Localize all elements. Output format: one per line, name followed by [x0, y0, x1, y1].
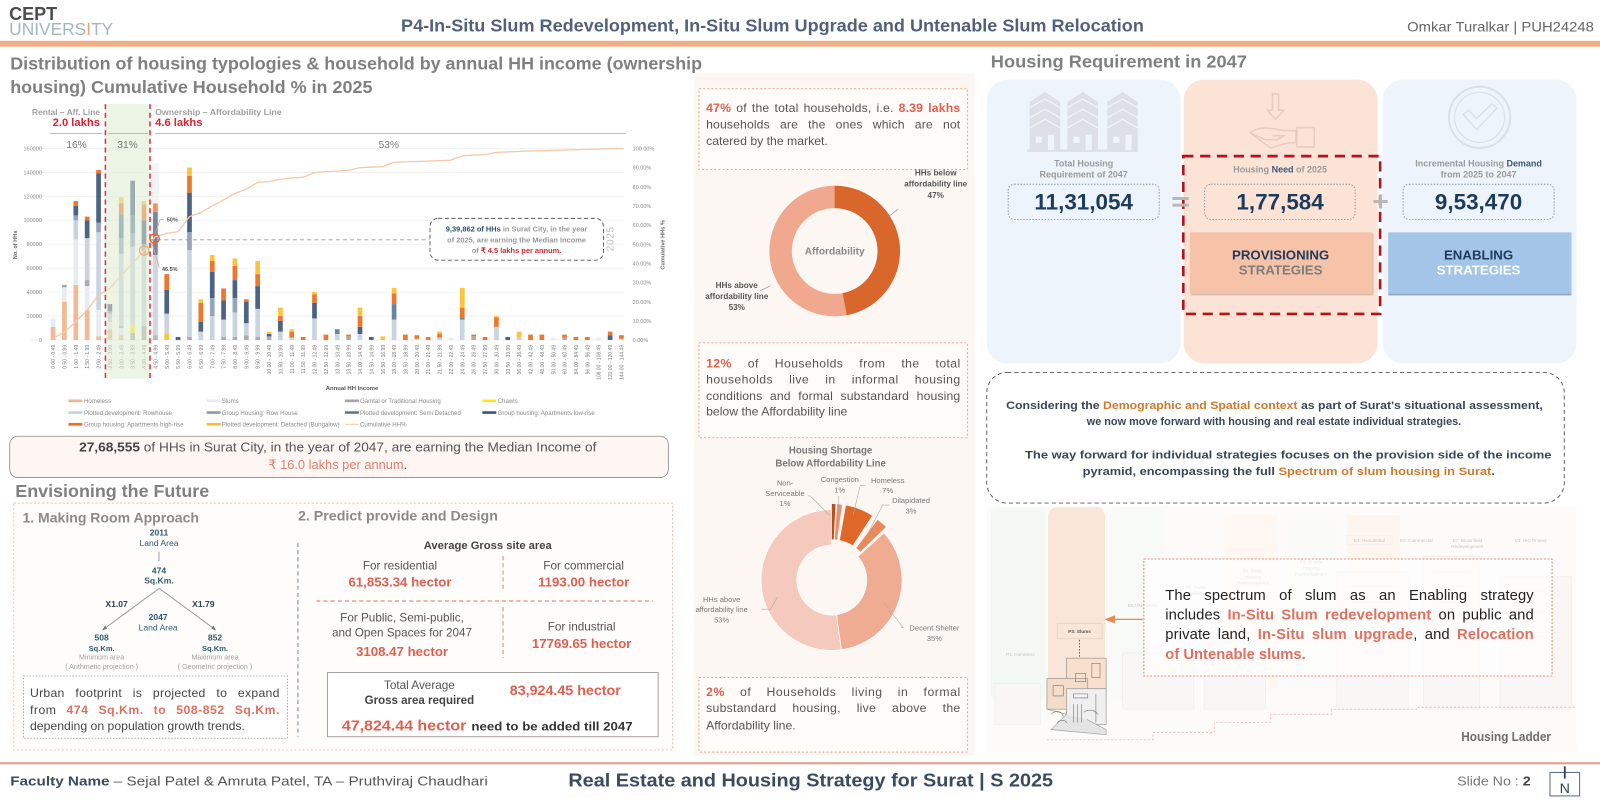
x axis labels: 120.00 - 120.49	[608, 345, 614, 380]
donut chart: housing shortage: Congestion	[821, 475, 859, 484]
legend: Plotted development: Detached (Bungalow)	[222, 422, 340, 429]
number: incremental demand	[1403, 184, 1554, 219]
label: housing ladder: Housing Ladder	[1461, 729, 1551, 744]
callout: 2025 median income: of 2025, are earning the Median Income	[447, 235, 586, 244]
faint ladder labels: Redevelopment	[1295, 572, 1328, 577]
section heading: distribution of housing typologies: Distribution of housing typologies & household by annual HH income (ownership	[10, 53, 702, 73]
section heading: envisioning the future: Envisioning the Future	[15, 481, 209, 501]
total gross area box: 83,924.45 hector	[510, 683, 621, 699]
left axis labels: 40000	[27, 290, 42, 296]
year label 2025: 2025	[605, 226, 616, 251]
callout: spectrum of slum: private land, In-Situ slum upgrade, and Relocation	[1165, 627, 1534, 643]
callout: spectrum of slum: includes In-Situ Slum redevelopment on public and	[1165, 607, 1534, 623]
x axis labels: 10.50 - 10.99	[278, 345, 284, 374]
right axis labels: 100.00%	[633, 146, 654, 152]
equals sign	[1172, 197, 1189, 207]
x axis labels: 6.00 - 6.49	[188, 345, 194, 369]
red affordability lines	[105, 104, 150, 379]
x axis labels: 60.00 - 60.49	[563, 345, 569, 374]
label: total housing requirement: Total Housing	[1054, 158, 1113, 168]
average gross site area grid: For commercial	[543, 559, 624, 572]
box: provisioning strategies	[1190, 232, 1373, 295]
legend: Group housing: Apartments low-rise	[498, 410, 595, 417]
median markers	[139, 217, 430, 273]
chart title: housing shortage	[775, 446, 886, 469]
x axis labels: 12.00 - 12.49	[313, 345, 319, 374]
label: housing need: Housing Need of 2025	[1233, 164, 1327, 174]
number: housing need: 1,77,584	[1236, 190, 1324, 215]
faint ladder labels: E7: Brownfield	[1453, 538, 1483, 543]
land area tree diagram: ( Geometric projection )	[178, 663, 252, 671]
label: P3 slums	[1057, 623, 1102, 639]
right axis labels: 40.00%	[633, 262, 651, 268]
x axis labels: 7.00 - 7.49	[210, 345, 216, 369]
legend: Plotted development: Rowhouse	[84, 410, 173, 417]
arrow: callout to slum column	[1106, 616, 1143, 622]
rental line label: 2.0 lakhs	[53, 117, 100, 129]
above-line shading	[151, 163, 159, 340]
legend: Cumulative HH%	[360, 422, 407, 429]
donut chart: housing shortage: HHs above	[703, 595, 740, 604]
callout: 12 percent informal	[699, 343, 967, 438]
left axis labels: 60000	[27, 266, 42, 272]
x axis labels: 1.00 - 1.49	[74, 345, 80, 369]
panel: housing ladder	[987, 506, 1577, 752]
land area tree diagram: 852	[208, 632, 222, 642]
faint ladder labels	[1006, 536, 1547, 657]
callout: 2025 median income: of ₹ 4.5 lakhs per annum.	[472, 246, 561, 255]
callout: 12 percent informal: below the Affordability line	[706, 404, 848, 418]
x axis labels: 108.00 - 108.49	[597, 345, 603, 380]
stacked bars	[53, 167, 621, 340]
cumulative line	[53, 148, 623, 338]
land area tree diagram	[65, 528, 252, 671]
section heading: distribution of housing typologies	[10, 53, 702, 97]
x axis labels: 14.50 - 14.99	[369, 345, 375, 374]
footer title: Real Estate and Housing Strategy for Surat | S 2025	[568, 770, 1053, 791]
logo: CEPT University	[9, 4, 114, 39]
donut chart: affordability: HHs above	[716, 281, 758, 290]
x axis labels: 42.00 - 42.49	[529, 345, 535, 374]
icon: north marker	[1550, 766, 1580, 797]
label: total housing requirement: Requirement of 2047	[1040, 170, 1128, 180]
right axis labels: 80.00%	[633, 185, 651, 191]
text box: urban footprint: from 474 Sq.Km. to 508-852 Sq.Km.	[30, 703, 279, 717]
text box: urban footprint	[23, 676, 287, 738]
x axis labels: 13.50 - 13.99	[347, 345, 353, 374]
chart: housing typology stacked bars and cumulative line	[13, 104, 666, 429]
faint ladder labels: E6: Private	[1300, 559, 1323, 564]
callout: 12 percent informal: 12% of Households from the total	[706, 356, 960, 370]
callout: 2025 median income: 9,39,862 of HHs in Surat City, in the year	[446, 225, 588, 234]
total gross area box: Total Average	[384, 679, 455, 692]
right axis labels: 30.00%	[633, 281, 651, 287]
total gross area box: 47,824.44 hector	[342, 719, 467, 735]
left axis labels: 100000	[23, 218, 42, 224]
text block: way forward statement	[987, 372, 1564, 503]
land area tree diagram: Sq.Km.	[202, 644, 228, 653]
x axis labels: 1.50 - 1.99	[85, 345, 91, 369]
x axis labels: 0.50 - 0.99	[62, 345, 68, 369]
x axis labels: 6.50 - 6.99	[199, 345, 205, 369]
section heading: housing requirement: Housing Requirement in 2047	[991, 51, 1247, 71]
donut chart: affordability: Affordability	[805, 247, 865, 258]
callout: 12 percent informal: conditions and formal substandard housing	[706, 389, 960, 403]
x axis labels: 7.50 - 7.99	[222, 345, 228, 369]
total gross area box: need to be added till 2047	[471, 721, 633, 734]
right axis labels: 10.00%	[633, 319, 651, 325]
share arrows: 53%	[379, 140, 399, 151]
right axis labels: 60.00%	[633, 223, 651, 229]
x axis labels: 13.00 - 13.49	[335, 345, 341, 374]
heading: making room approach: 1. Making Room Approach	[22, 510, 199, 526]
x axis labels: 22.00 - 22.49	[449, 345, 455, 374]
x axis labels: 30.00 - 30.49	[494, 345, 500, 374]
donut chart: housing shortage: affordability line	[695, 605, 748, 614]
share arrows: 16%	[66, 140, 87, 151]
text block: way forward statement: pyramid, encompassing the full Spectrum of slum housing in Surat .	[1083, 466, 1495, 478]
callout: 2047 median income	[10, 436, 668, 478]
icon: houses	[1027, 92, 1139, 152]
donut chart: affordability: affordability line	[904, 180, 968, 189]
x axis labels: 9.50 - 9.99	[256, 345, 262, 369]
x axis title: Annual HH Income	[326, 386, 379, 392]
legend	[68, 398, 595, 429]
legend: Plotted development: Semi Detached	[360, 410, 461, 417]
average gross site area grid: 17769.65 hector	[532, 636, 631, 651]
median markers: 50%	[167, 217, 178, 223]
ownership line label: 4.6 lakhs	[155, 117, 203, 129]
average gross site area grid	[316, 540, 653, 659]
callout: 2047 median income: ₹ 16.0 lakhs per annum.	[268, 457, 407, 472]
total gross area box: Gross area required	[365, 695, 474, 707]
panel: envisioning the future	[14, 503, 672, 750]
icon: check mark badge	[1449, 87, 1510, 148]
x axis labels: 36.00 - 36.49	[517, 345, 523, 374]
x axis labels: 18.00 - 18.49	[392, 345, 398, 374]
callout: 2047 median income: 27,68,555 of HHs in Surat City, in the year of 2047, are earning the Median Income of	[79, 440, 597, 455]
callout: 47 percent not catered: 47% of the total households, i.e. 8.39 lakhs	[706, 101, 960, 115]
box: provisioning strategies: PROVISIONING	[1232, 248, 1329, 263]
rental line label	[32, 107, 100, 129]
left axis labels: 80000	[27, 242, 42, 248]
callout: 12 percent informal: households live in informal housing	[706, 373, 960, 387]
callout: 2 percent above line: 2% of Households living in formal	[706, 685, 960, 699]
x axis labels: 48.00 - 48.49	[540, 345, 546, 374]
donut chart: housing shortage: Homeless	[871, 476, 905, 485]
callout: 47 percent not catered: catered by the market.	[706, 134, 828, 148]
faint ladder labels: P1: Public	[1186, 585, 1207, 590]
left axis labels: 120000	[23, 194, 42, 200]
box: provisioning strategies: STRATEGIES	[1239, 262, 1323, 277]
plus sign	[1373, 194, 1388, 209]
donut chart: affordability: 47%	[928, 191, 945, 200]
x axis labels: 84.00 - 84.49	[574, 345, 580, 374]
icon: hand and arrow	[1250, 94, 1314, 148]
text box: urban footprint: depending on population growth trends.	[30, 719, 245, 733]
x axis labels: 16.50 - 16.99	[381, 345, 387, 374]
callout: spectrum of slum	[1144, 559, 1552, 676]
donut chart: housing shortage: Decent Shelter	[909, 624, 960, 633]
x axis labels: 12.50 - 12.99	[324, 345, 330, 374]
left axis labels: 140000	[23, 170, 42, 176]
callout: 47 percent not catered: households are the ones which are not	[706, 118, 961, 132]
x axis labels: 26.00 - 26.49	[472, 345, 478, 374]
header	[0, 4, 1600, 47]
callout: 47 percent not catered	[699, 89, 967, 169]
x axis labels: 10.00 - 10.49	[267, 345, 273, 374]
faint ladder labels: Housing	[1303, 565, 1320, 570]
chart title: housing shortage: Below Affordability Line	[775, 458, 886, 469]
x axis labels: 24.00 - 24.49	[460, 345, 466, 374]
x axis labels: 96.00 - 96.49	[585, 345, 591, 374]
panel: total housing requirement	[987, 80, 1181, 363]
legend: Group Housing: Row House	[222, 410, 298, 417]
right axis labels: 0.00%	[633, 338, 648, 344]
right axis labels: 90.00%	[633, 166, 651, 172]
land area tree diagram: Maximum area	[191, 654, 239, 662]
x axis labels: 4.50 - 4.99	[153, 345, 159, 369]
land area tree diagram: Minimum area	[79, 654, 124, 662]
box: enabling strategies: STRATEGIES	[1437, 262, 1521, 277]
text block: way forward statement: The way forward for individual strategies focuses on the provision side of the income	[1025, 450, 1552, 462]
total gross area box	[328, 672, 658, 737]
left axis title: No. of HHs	[13, 231, 19, 259]
donut chart: housing shortage: Dilapidated	[892, 496, 930, 505]
label: P3 slums: P3: Slums	[1068, 629, 1091, 634]
section heading: distribution of housing typologies: housing) Cumulative Household % in 2025	[10, 77, 373, 97]
x axis labels: 2.00 - 2.49	[97, 345, 103, 369]
text block: way forward statement: Considering the Demographic and Spatial context as part of Surat's situational assessment,	[1006, 400, 1543, 412]
chart title: housing shortage: Housing Shortage	[789, 446, 873, 457]
donut chart: housing shortage: Serviceable	[765, 489, 805, 498]
x axis labels	[51, 345, 625, 380]
donut chart: housing shortage: 53%	[714, 615, 729, 624]
label: incremental demand: from 2025 to 2047	[1441, 170, 1516, 180]
left axis labels: 20000	[27, 314, 42, 320]
label: incremental demand: Incremental Housing Demand	[1415, 158, 1542, 168]
donut chart: housing shortage: 3%	[906, 506, 917, 515]
average gross site area grid: Average Gross site area	[424, 540, 553, 552]
median markers: 46.5%	[162, 267, 178, 273]
label: incremental demand	[1415, 158, 1542, 180]
x axis labels: 5.50 - 5.99	[176, 345, 182, 369]
ownership line label: Ownership – Affordability Line	[155, 107, 282, 117]
x axis labels: 9.00 - 9.49	[244, 345, 250, 369]
header title: P4-In-Situ Slum Redevelopment, In-Situ Slum Upgrade and Untenable Slum Relocation	[401, 16, 1144, 36]
faint ladder labels: Redevelopment	[1451, 544, 1484, 549]
donut chart: housing shortage: 1%	[780, 499, 791, 508]
footer rule	[0, 762, 1600, 764]
callout: 2 percent above line	[699, 678, 967, 752]
donut chart: housing shortage: Non-	[777, 479, 794, 488]
land area tree diagram: Sq.Km.	[144, 576, 174, 586]
donut chart: housing shortage: 35%	[927, 634, 942, 643]
x axis labels: 18.50 - 18.99	[403, 345, 409, 374]
label: total housing requirement	[1040, 158, 1128, 180]
land area tree diagram: Sq.Km.	[89, 644, 115, 653]
legend: Group housing: Apartments high-rise	[84, 422, 184, 429]
divider between approaches	[297, 543, 299, 737]
red dashed highlight	[1183, 156, 1380, 314]
share arrows: 31%	[117, 140, 138, 151]
x axis labels: 27.50 - 27.99	[483, 345, 489, 374]
faint ladder labels: P2: Homeless	[1006, 652, 1035, 657]
callout: 2 percent above line: Affordability line.	[706, 719, 796, 733]
number: incremental demand: 9,53,470	[1435, 190, 1522, 215]
faculty credits: Faculty Name – Sejal Patel & Amruta Patel, TA – Pruthviraj Chaudhari	[10, 774, 488, 789]
right axis labels	[633, 146, 654, 344]
x axis labels: 3.50 - 3.99	[131, 345, 137, 369]
rental line label: Rental – Aff. Line	[32, 107, 100, 117]
x axis labels: 21.50 - 21.99	[438, 345, 444, 374]
author: Omkar Turalkar | PUH24248	[1407, 20, 1594, 35]
number: housing need	[1205, 184, 1355, 219]
panel: incremental demand	[1383, 80, 1577, 363]
logo: CEPT University: UNIVERSITY	[9, 19, 114, 39]
average gross site area grid: and Open Spaces for 2047	[332, 627, 472, 640]
land area tree diagram: 508	[94, 632, 109, 642]
left axis labels: 0	[39, 338, 42, 344]
land area tree diagram: Land Area	[139, 623, 178, 633]
average gross site area grid: 3108.47 hector	[356, 644, 448, 659]
callout: 2025 median income	[430, 218, 603, 260]
donut chart: housing shortage: 1%	[834, 485, 846, 494]
faint ladder labels: Housing	[1188, 591, 1205, 596]
ladder columns	[991, 507, 1400, 701]
x axis labels: 50.00 - 50.49	[551, 345, 557, 374]
affordability band overlay	[105, 104, 150, 379]
x axis labels: 3.00 - 3.49	[119, 345, 125, 369]
text block: way forward statement: we now move forward with housing and real estate individual strategies.	[1086, 416, 1461, 428]
right axis title: Cumulative HHs %	[660, 220, 666, 270]
donut chart: affordability: affordability line	[705, 292, 769, 301]
legend: Homeless	[84, 398, 111, 405]
x axis labels: 33.50 - 33.99	[506, 345, 512, 374]
ownership line label	[155, 107, 282, 129]
right axis labels: 50.00%	[633, 242, 651, 248]
callout: spectrum of slum: of Untenable slums.	[1165, 647, 1306, 663]
header band	[0, 41, 1600, 47]
right axis labels: 20.00%	[633, 300, 651, 306]
average gross site area grid: 1193.00 hector	[538, 575, 629, 590]
faint ladder labels: E4: Public	[1243, 568, 1264, 573]
box: enabling strategies	[1388, 232, 1571, 295]
faint ladder labels: E1: Residential	[1354, 538, 1385, 543]
x axis labels: 4.00 - 4.49	[142, 345, 148, 369]
average gross site area grid: For Public, Semi-public,	[340, 611, 464, 624]
faint ladder labels: E6 / P4: SRAC	[1128, 603, 1159, 608]
faint ladder labels: E3: HIG Project	[1515, 538, 1547, 543]
illustration: slum sketch	[1047, 640, 1106, 735]
callout: 2 percent above line: substandard housing, live above the	[706, 701, 960, 715]
number: total requirement	[1008, 184, 1159, 219]
donut chart: affordability: HHs below	[915, 169, 957, 178]
x axis labels: 14.00 - 14.49	[358, 345, 364, 374]
donut chart: affordability: 53%	[729, 303, 746, 312]
average gross site area grid: 61,853.34 hector	[348, 575, 452, 590]
text box: urban footprint: Urban footprint is projected to expand	[30, 686, 280, 700]
stepped ground line	[1047, 707, 1577, 740]
x axis labels: 11.50 - 11.99	[301, 345, 307, 374]
average gross site area grid: For residential	[363, 559, 437, 572]
x axis labels: 20.00 - 20.49	[415, 345, 421, 374]
left axis labels	[23, 146, 42, 344]
panel: housing need	[1184, 80, 1378, 363]
number: total requirement: 11,31,054	[1034, 190, 1133, 215]
icon: north marker: N	[1560, 781, 1570, 797]
donut chart: housing shortage: 7%	[882, 486, 893, 495]
slide number: Slide No : 2	[1457, 774, 1531, 789]
donut chart: housing shortage	[695, 475, 960, 650]
x axis labels: 8.00 - 8.49	[233, 345, 239, 369]
land area tree diagram: 2047	[149, 612, 168, 622]
x axis labels: 21.00 - 21.49	[426, 345, 432, 374]
legend: Slums	[222, 398, 239, 405]
share arrows	[50, 133, 626, 151]
land area tree diagram: 2011	[150, 528, 169, 538]
x axis labels: 144.00 - 144.49	[619, 345, 625, 380]
callout: spectrum of slum: The spectrum of slum as an Enabling strategy	[1165, 588, 1534, 604]
left axis labels: 160000	[23, 146, 42, 152]
faint ladder labels: E2: Commercial	[1400, 538, 1433, 543]
average gross site area grid: For industrial	[548, 621, 615, 634]
x axis labels: 11.00 - 11.49	[290, 345, 296, 374]
legend: Gamtal or Traditional Housing	[360, 398, 441, 405]
logo: CEPT University: CEPT	[9, 4, 57, 24]
legend: Chawls	[498, 398, 518, 405]
panel: affordability column	[694, 73, 974, 755]
x axis labels: 0.00 - 0.49	[51, 345, 57, 369]
faint ladder labels: Redevelopment	[1237, 581, 1270, 586]
land area tree diagram: X1.79	[192, 599, 215, 609]
x axis labels: 5.00 - 5.49	[165, 345, 171, 369]
land area tree diagram: ( Arithmetic projection )	[65, 663, 138, 671]
box: enabling strategies: ENABLING	[1444, 248, 1513, 263]
footer	[0, 762, 1600, 797]
land area tree diagram: Land Area	[139, 538, 179, 548]
right axis labels: 70.00%	[633, 204, 651, 210]
heading: predict provide and design: 2. Predict provide and Design	[298, 508, 498, 523]
faint ladder labels: Housing	[1245, 575, 1262, 580]
land area tree diagram: X1.07	[105, 599, 128, 609]
land area tree diagram: 474	[152, 565, 166, 575]
faint building sketch	[995, 556, 1571, 724]
x axis labels: 2.50 - 3.00	[108, 345, 114, 369]
donut chart: affordability	[705, 169, 968, 312]
